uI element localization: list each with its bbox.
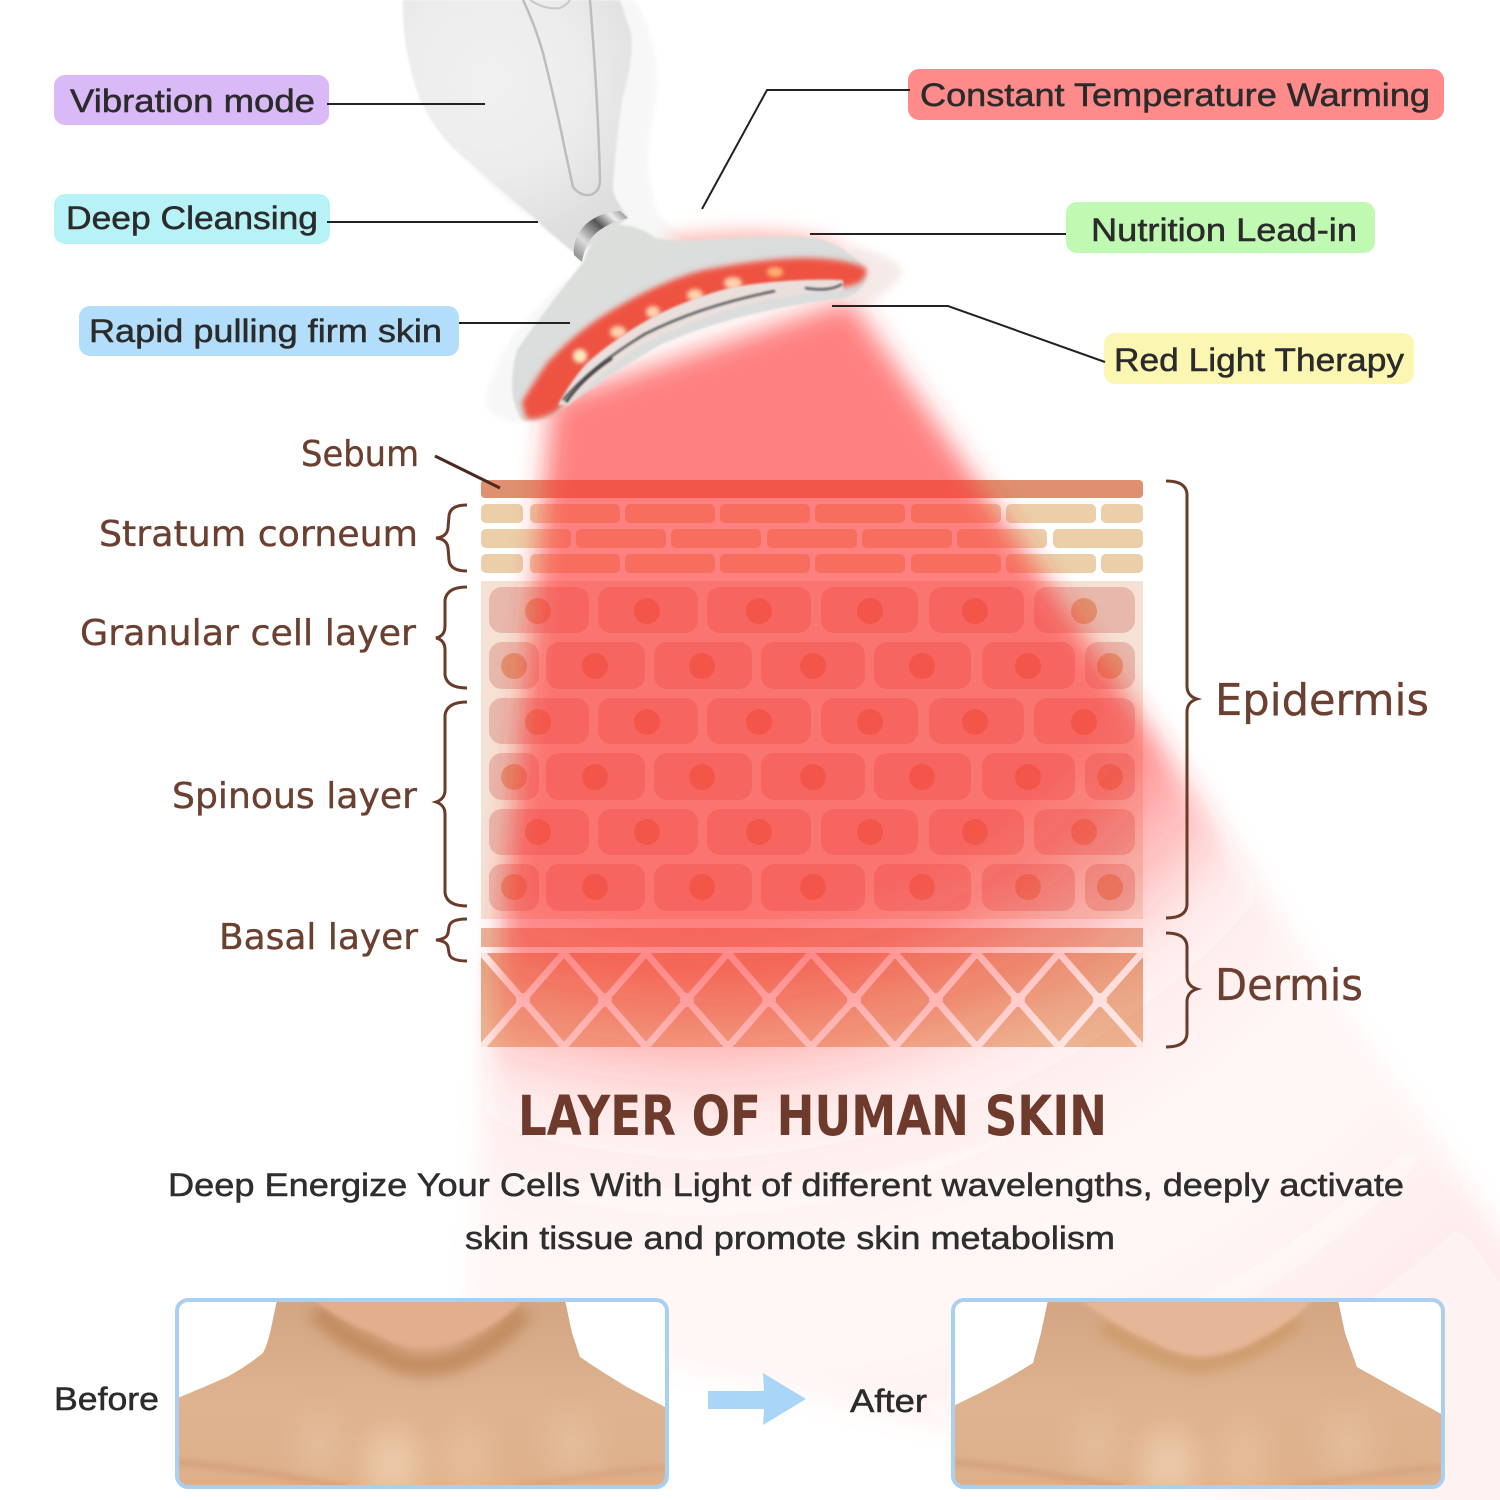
callout: Nutrition Lead-in <box>810 202 1375 253</box>
description text: skin tissue and promote skin metabolism <box>465 1220 1115 1256</box>
callout: Vibration mode: Vibration mode <box>70 83 315 119</box>
chrome collar <box>574 211 628 262</box>
label: Spinous layer <box>172 702 467 906</box>
callout: Rapid pulling firm skin: Rapid pulling firm skin <box>89 313 442 349</box>
metal plate streak <box>566 358 612 402</box>
description text: Deep Energize Your Cells With Light of different wavelengths, deeply activate <box>168 1167 1404 1203</box>
label: Granular cell layer <box>80 587 467 688</box>
title: LAYER OF HUMAN SKIN <box>518 1084 1107 1148</box>
label: Granular cell layer: Granular cell layer <box>80 613 416 654</box>
label: Basal layer: Basal layer <box>219 917 418 958</box>
device head <box>512 224 866 420</box>
cell nuclei <box>501 598 1123 900</box>
label: Epidermis: Epidermis <box>1215 675 1429 726</box>
callout: Vibration mode <box>54 75 485 125</box>
handle button outline <box>523 0 600 195</box>
callout: Constant Temperature Warming: Constant Temperature Warming <box>920 77 1430 113</box>
red LED band <box>522 258 866 419</box>
label: Dermis: Dermis <box>1215 960 1363 1011</box>
device: neck massager <box>403 0 903 423</box>
device ghost right <box>840 246 903 305</box>
callout: Deep Cleansing: Deep Cleansing <box>66 200 318 236</box>
metal plate <box>558 280 843 405</box>
label: Sebum <box>301 434 500 488</box>
label: Stratum corneum <box>99 505 467 571</box>
label: Stratum corneum: Stratum corneum <box>99 514 418 555</box>
metal plate highlight <box>563 284 842 400</box>
callout: Red Light Therapy: Red Light Therapy <box>1114 342 1404 378</box>
stratum corneum bricks <box>481 504 1143 573</box>
label: After: After <box>850 1383 927 1419</box>
label: Before: Before <box>54 1381 159 1417</box>
photo: after neck <box>953 1300 1443 1500</box>
device handle <box>403 0 632 255</box>
label: Epidermis <box>1166 481 1429 918</box>
label: Spinous layer: Spinous layer <box>172 776 417 817</box>
callout: Rapid pulling firm skin <box>79 306 570 356</box>
label: Dermis <box>1166 933 1363 1047</box>
description text <box>168 1167 1404 1256</box>
device ghost outline <box>404 0 700 423</box>
callout: Red Light Therapy <box>832 306 1414 384</box>
mode button <box>530 0 570 8</box>
cell block base <box>481 581 1143 919</box>
callout: Nutrition Lead-in: Nutrition Lead-in <box>1091 212 1357 248</box>
dermis lattice <box>481 953 1143 1047</box>
red light beam <box>465 300 1500 1500</box>
sebum layer <box>481 480 1143 498</box>
photo: before neck <box>177 1300 667 1500</box>
basal layer strip <box>481 928 1143 947</box>
label: Sebum: Sebum <box>301 434 419 475</box>
arrow <box>708 1373 806 1425</box>
LED dots <box>573 267 783 363</box>
callout: Constant Temperature Warming <box>702 69 1444 209</box>
device top glow <box>660 230 860 262</box>
callout: Deep Cleansing <box>54 194 538 244</box>
skin layers diagram <box>481 480 1143 1047</box>
cell rows <box>489 587 1135 911</box>
